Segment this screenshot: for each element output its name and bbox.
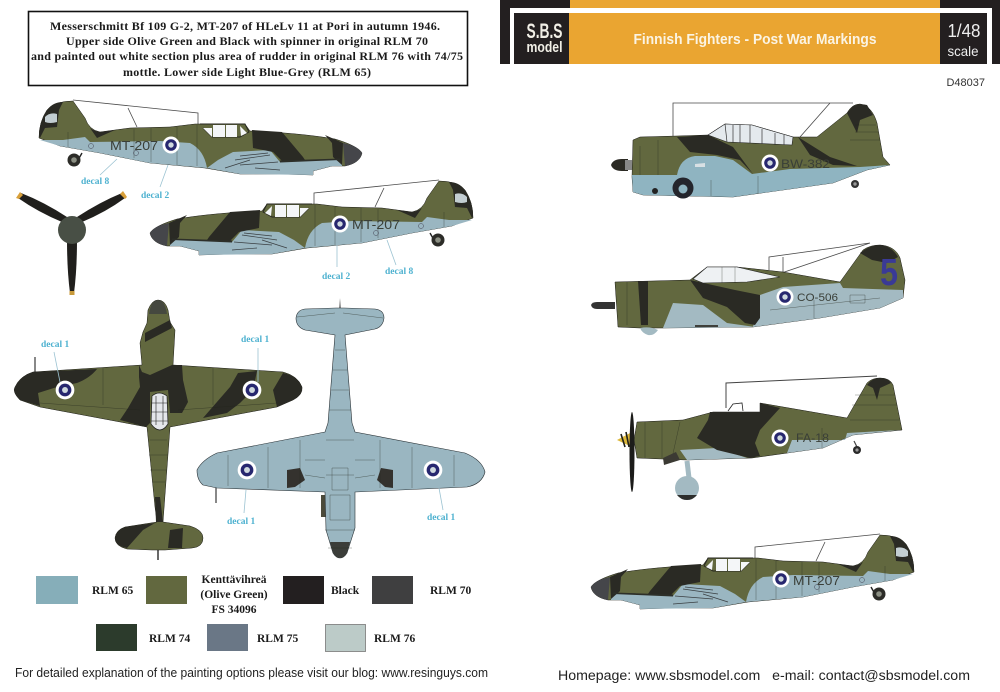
aircraft: Brewster — [611, 103, 890, 198]
logo: S.B.S model: S.B.S — [526, 20, 562, 43]
title text box: and painted out white section plus area of rudder in original RLM 76 with 74/75 — [31, 49, 463, 63]
swatch: Olive Green: FS 34096 — [211, 604, 257, 616]
aircraft: Curtiss Hawk — [591, 243, 905, 335]
swatch: RLM 74 — [96, 624, 190, 651]
swatch: Black — [283, 576, 360, 604]
scale: scale — [948, 43, 979, 59]
callouts: right side view: decal 2 — [322, 272, 350, 282]
callouts: left side view — [81, 159, 169, 201]
callouts: top view — [41, 335, 269, 382]
callouts: top view: decal 1 — [241, 335, 269, 345]
aircraft: Bf 109 left side view — [39, 100, 362, 175]
swatch: RLM 74: RLM 74 — [149, 633, 190, 645]
callouts: top view: decal 1 — [41, 340, 69, 350]
aircraft: underside view — [197, 298, 485, 558]
colour legend — [36, 574, 471, 652]
aircraft: Curtiss Hawk: CO-506 — [797, 292, 838, 304]
callouts: underside view — [227, 488, 455, 527]
swatch: Olive Green: Kenttävihreä — [202, 574, 267, 586]
swatch: Black: Black — [331, 585, 360, 597]
logo: S.B.S model — [526, 20, 562, 56]
aircraft: Curtiss Hawk: 5 — [880, 252, 898, 294]
footer: contact details: Homepage: www.sbsmodel.com e-mail: contact@sbsmodel.com — [558, 668, 970, 683]
logo: S.B.S model: model — [526, 39, 562, 56]
scale — [948, 21, 980, 59]
callouts: underside view: decal 1 — [227, 517, 255, 527]
swatch: RLM 76: RLM 76 — [374, 633, 415, 645]
aircraft: Fiat G.50: FA-18 — [796, 431, 829, 445]
aircraft: Bf 109 left side view: MT-207 — [110, 138, 158, 153]
callouts: right side view — [322, 240, 413, 282]
callouts: right side view: decal 8 — [385, 267, 413, 277]
swatch: Olive Green — [146, 574, 268, 616]
footer: blog note: For detailed explanation of the painting options please visit our blog: www.resinguys.com — [15, 666, 488, 680]
aircraft: Bf 109 lower right — [591, 534, 914, 609]
banner title: Finnish Fighters - Post War Markings — [634, 32, 876, 48]
title text box: Messerschmitt Bf 109 G-2, MT-207 of HLeLv 11 at Pori in autumn 1946. — [50, 19, 440, 33]
swatch: RLM 70 — [372, 576, 471, 604]
swatch: RLM 76 — [326, 624, 415, 652]
aircraft: Brewster: BW-382 — [781, 157, 830, 171]
swatch: RLM 75: RLM 75 — [257, 633, 298, 645]
callouts: left side view: decal 2 — [141, 191, 169, 201]
callouts: left side view: decal 8 — [81, 177, 109, 187]
swatch: RLM 70: RLM 70 — [430, 585, 471, 597]
propeller front view — [16, 191, 127, 295]
swatch: RLM 75 — [207, 624, 298, 651]
scale: 1/48 — [948, 21, 980, 41]
aircraft: top view — [14, 300, 302, 560]
swatch: Olive Green: (Olive Green) — [200, 589, 268, 601]
title text box: mottle. Lower side Light Blue-Grey (RLM 65) — [123, 65, 371, 79]
title text box: Upper side Olive Green and Black with spinner in original RLM 70 — [66, 34, 428, 48]
callouts: underside view: decal 1 — [427, 513, 455, 523]
swatch: RLM 65: RLM 65 — [92, 585, 133, 597]
aircraft: Fiat G.50 — [617, 376, 902, 500]
header banner — [500, 0, 1000, 64]
product code: D48037 — [946, 77, 985, 89]
aircraft: Bf 109 right side view: MT-207 — [352, 217, 400, 232]
aircraft: Bf 109 lower right: MT-207 — [793, 573, 840, 588]
swatch: RLM 65 — [36, 576, 133, 604]
aircraft: Bf 109 right side view — [150, 180, 473, 255]
title text box — [28, 12, 468, 86]
